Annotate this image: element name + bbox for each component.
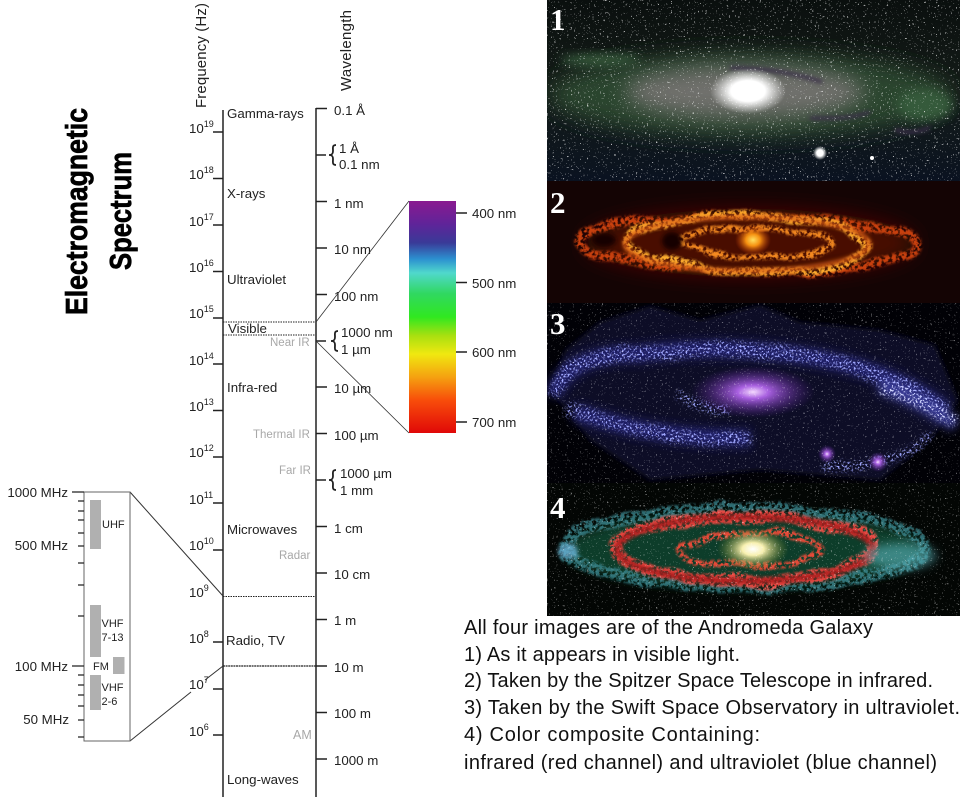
title: Spectrum bbox=[103, 152, 138, 270]
wavelength axis: 1 Å bbox=[339, 141, 359, 156]
band labels: Gamma-rays bbox=[227, 106, 304, 121]
label: 4: 4 bbox=[550, 490, 566, 525]
label: 2: 2 bbox=[550, 185, 566, 220]
radio band detail: VHF bbox=[102, 682, 124, 694]
dotted band boundaries bbox=[223, 322, 316, 666]
band labels: Thermal IR bbox=[253, 429, 310, 441]
caption: infrared (red channel) and ultraviolet (blue channel) bbox=[464, 752, 937, 774]
frequency axis: 18 bbox=[204, 165, 214, 175]
wavelength axis: 1 µm bbox=[341, 342, 371, 357]
frequency axis: 10 bbox=[189, 724, 204, 739]
star field: panel 1 bbox=[547, 0, 960, 181]
radio band detail: FM bbox=[93, 661, 109, 673]
band labels: X-rays bbox=[227, 186, 266, 201]
frequency axis: 10 bbox=[189, 399, 204, 414]
radio band detail: 2-6 bbox=[102, 696, 117, 708]
radio band detail: 1000 MHz bbox=[7, 485, 68, 500]
panel 4: composite galaxy bbox=[547, 483, 960, 616]
frequency axis: 8 bbox=[204, 629, 209, 639]
band labels: Ultraviolet bbox=[227, 272, 286, 287]
wavelength axis: 1000 nm bbox=[341, 325, 393, 340]
wavelength axis bbox=[316, 103, 393, 797]
caption: All four images are of the Andromeda Galaxy bbox=[464, 617, 873, 639]
wavelength axis: 100 nm bbox=[334, 289, 378, 304]
frequency axis: 6 bbox=[204, 722, 209, 732]
band labels: Visible bbox=[228, 321, 267, 336]
caption: 4) Color composite Containing: bbox=[464, 724, 760, 746]
visible spectrum bar: 600 nm bbox=[472, 345, 516, 360]
radio band detail: UHF bbox=[102, 519, 125, 531]
frequency axis: 9 bbox=[204, 583, 209, 593]
frequency axis: 10 bbox=[189, 631, 204, 646]
caption: 1) As it appears in visible light. bbox=[464, 644, 740, 666]
frequency axis: 10 bbox=[189, 492, 204, 507]
caption bbox=[464, 617, 960, 774]
frequency axis: 10 bbox=[189, 260, 204, 275]
band labels: Radio, TV bbox=[226, 633, 285, 648]
visible spectrum bar: 400 nm bbox=[472, 206, 516, 221]
visible spectrum bar bbox=[409, 201, 516, 433]
band labels: AM bbox=[293, 728, 312, 742]
visible spectrum bar: 500 nm bbox=[472, 276, 516, 291]
frequency axis: 10 bbox=[189, 167, 204, 182]
panel 3: ultraviolet galaxy bbox=[547, 303, 960, 483]
frequency axis: 10 bbox=[189, 445, 204, 460]
visible spectrum bar: 700 nm bbox=[472, 415, 516, 430]
wavelength axis: 1000 µm bbox=[340, 466, 392, 481]
radio band detail: 50 MHz bbox=[23, 712, 69, 727]
label: 3: 3 bbox=[550, 306, 566, 341]
frequency axis: 11 bbox=[204, 490, 213, 500]
frequency axis: 14 bbox=[204, 351, 214, 361]
frequency axis: 13 bbox=[204, 397, 214, 407]
wavelength axis: 10 µm bbox=[334, 381, 371, 396]
frequency axis: 15 bbox=[204, 304, 214, 314]
frequency axis: 10 bbox=[189, 538, 204, 553]
wavelength axis: 1 mm bbox=[340, 483, 373, 498]
wavelength axis: 1 nm bbox=[334, 196, 364, 211]
frequency axis: 12 bbox=[204, 443, 214, 453]
frequency axis: 7 bbox=[204, 675, 209, 685]
band labels: Radar bbox=[279, 550, 310, 562]
wavelength axis: 1 m bbox=[334, 613, 356, 628]
frequency axis: 10 bbox=[189, 214, 204, 229]
band labels bbox=[226, 106, 312, 787]
wavelength axis: 0.1 Å bbox=[334, 103, 365, 118]
radio band detail: 100 MHz bbox=[15, 659, 68, 674]
star field: panel 4 bbox=[547, 483, 960, 616]
band labels: Near IR bbox=[270, 337, 310, 349]
caption: 2) Taken by the Spitzer Space Telescope in infrared. bbox=[464, 670, 933, 692]
frequency axis: 16 bbox=[204, 258, 214, 268]
zoom lines to visible spectrum bbox=[316, 201, 409, 433]
caption: 3) Taken by the Swift Space Observatory in ultraviolet. bbox=[464, 697, 960, 719]
panel 1: visible light galaxy bbox=[547, 0, 960, 181]
wavelength axis: 10 nm bbox=[334, 242, 371, 257]
axis title: wavelength: Wavelength bbox=[338, 10, 355, 91]
frequency axis bbox=[189, 110, 223, 797]
radio band detail: VHF bbox=[102, 618, 124, 630]
band labels: Far IR bbox=[279, 465, 311, 477]
frequency axis: 19 bbox=[204, 119, 214, 129]
radio band detail bbox=[7, 485, 130, 741]
band labels: Microwaves bbox=[227, 522, 298, 537]
frequency axis: 10 bbox=[189, 677, 204, 692]
wavelength axis: 1 cm bbox=[334, 521, 363, 536]
title bbox=[59, 108, 138, 315]
band labels: Long-waves bbox=[227, 772, 299, 787]
zoom lines to radio box bbox=[130, 492, 223, 741]
frequency axis: 10 bbox=[189, 121, 204, 136]
frequency axis: 10 bbox=[189, 353, 204, 368]
wavelength axis: 100 m bbox=[334, 706, 371, 721]
frequency axis: 10 bbox=[189, 306, 204, 321]
wavelength axis: 10 m bbox=[334, 660, 364, 675]
band labels: Infra-red bbox=[227, 380, 277, 395]
radio band detail: 7-13 bbox=[102, 632, 124, 644]
title: Electromagnetic bbox=[59, 108, 94, 315]
wavelength axis: 100 µm bbox=[334, 428, 379, 443]
label: 1: 1 bbox=[550, 2, 566, 37]
wavelength axis: 0.1 nm bbox=[339, 157, 380, 172]
star field: panel 3 bbox=[547, 303, 960, 483]
wavelength axis: 1000 m bbox=[334, 753, 378, 768]
frequency axis: 17 bbox=[204, 212, 214, 222]
axis title: frequency: Frequency (Hz) bbox=[193, 3, 210, 108]
wavelength axis: 10 cm bbox=[334, 567, 370, 582]
radio band detail: 500 MHz bbox=[15, 538, 68, 553]
panel 2: infrared galaxy bbox=[547, 181, 960, 303]
frequency axis: 10 bbox=[204, 536, 214, 546]
frequency axis: 10 bbox=[189, 585, 204, 600]
